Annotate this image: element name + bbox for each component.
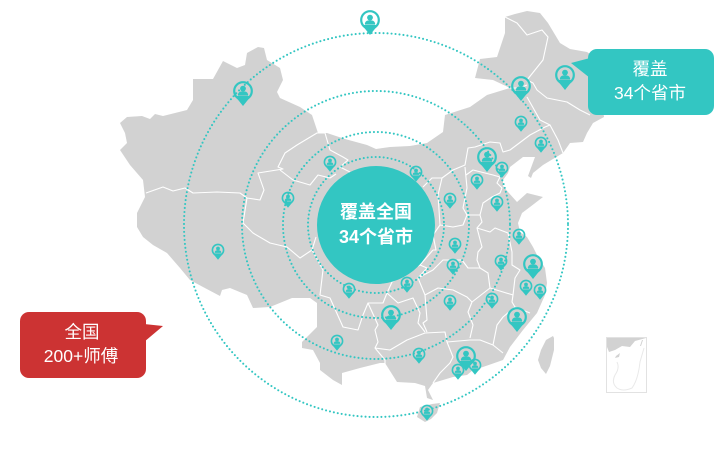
dotted coverage rings xyxy=(184,33,568,417)
small pin 1 xyxy=(324,156,336,172)
small pin 4 xyxy=(343,283,355,299)
small pin 12 xyxy=(535,137,547,153)
small pin 6 xyxy=(331,335,343,351)
large pin: Shanghai xyxy=(524,255,542,279)
location pins xyxy=(212,10,574,421)
large pin: Fuzhou area xyxy=(508,308,526,332)
small pin 15 xyxy=(449,238,461,254)
central headline: 34个省市 xyxy=(339,226,413,247)
province borders xyxy=(146,133,350,200)
small pin 11 xyxy=(515,116,527,132)
small pin 20 xyxy=(444,295,456,311)
small pin 16 xyxy=(447,259,459,275)
large pin: Guangzhou xyxy=(457,347,475,371)
small pin 14 xyxy=(513,229,525,245)
callout: red masters xyxy=(20,312,163,378)
large pin: Beijing xyxy=(478,148,496,172)
small pin 10 xyxy=(496,162,508,178)
small pin 25 xyxy=(421,405,433,421)
large pin: top of ring xyxy=(360,10,380,35)
small pin 7 xyxy=(410,166,422,182)
central headline: 覆盖全国 xyxy=(340,201,412,222)
small pin 9 xyxy=(471,174,483,190)
small pin 22 xyxy=(413,348,425,364)
small pin 21 xyxy=(486,293,498,309)
inset map: South China Sea xyxy=(606,338,646,392)
small pin 5 xyxy=(401,277,413,293)
small pin 23 xyxy=(469,359,481,375)
Hainan xyxy=(417,403,440,422)
callout text: coverage: 覆盖 xyxy=(632,59,668,79)
small pin 19 xyxy=(534,284,546,300)
large pin: Guiyang area xyxy=(382,306,400,330)
small pin 18 xyxy=(520,280,532,296)
small pin 17 xyxy=(495,255,507,271)
Taiwan xyxy=(538,336,554,374)
central circle with headline xyxy=(317,166,435,284)
small pin 2 xyxy=(282,192,294,208)
callout text: masters: 200+师傅 xyxy=(44,346,118,366)
callout: teal coverage xyxy=(571,49,714,115)
map of China xyxy=(120,11,604,422)
small pin 8 xyxy=(444,193,456,209)
small pin 24 xyxy=(452,364,464,380)
large pin: Harbin xyxy=(556,66,574,90)
large pin: Changchun area xyxy=(512,77,530,101)
callout text: coverage: 34个省市 xyxy=(614,83,686,103)
callout text: masters: 全国 xyxy=(64,322,100,342)
small pin 3 xyxy=(212,244,224,260)
small pin 13 xyxy=(491,196,503,212)
large pin: Urumqi xyxy=(234,82,252,106)
mainland landmass xyxy=(120,11,604,400)
